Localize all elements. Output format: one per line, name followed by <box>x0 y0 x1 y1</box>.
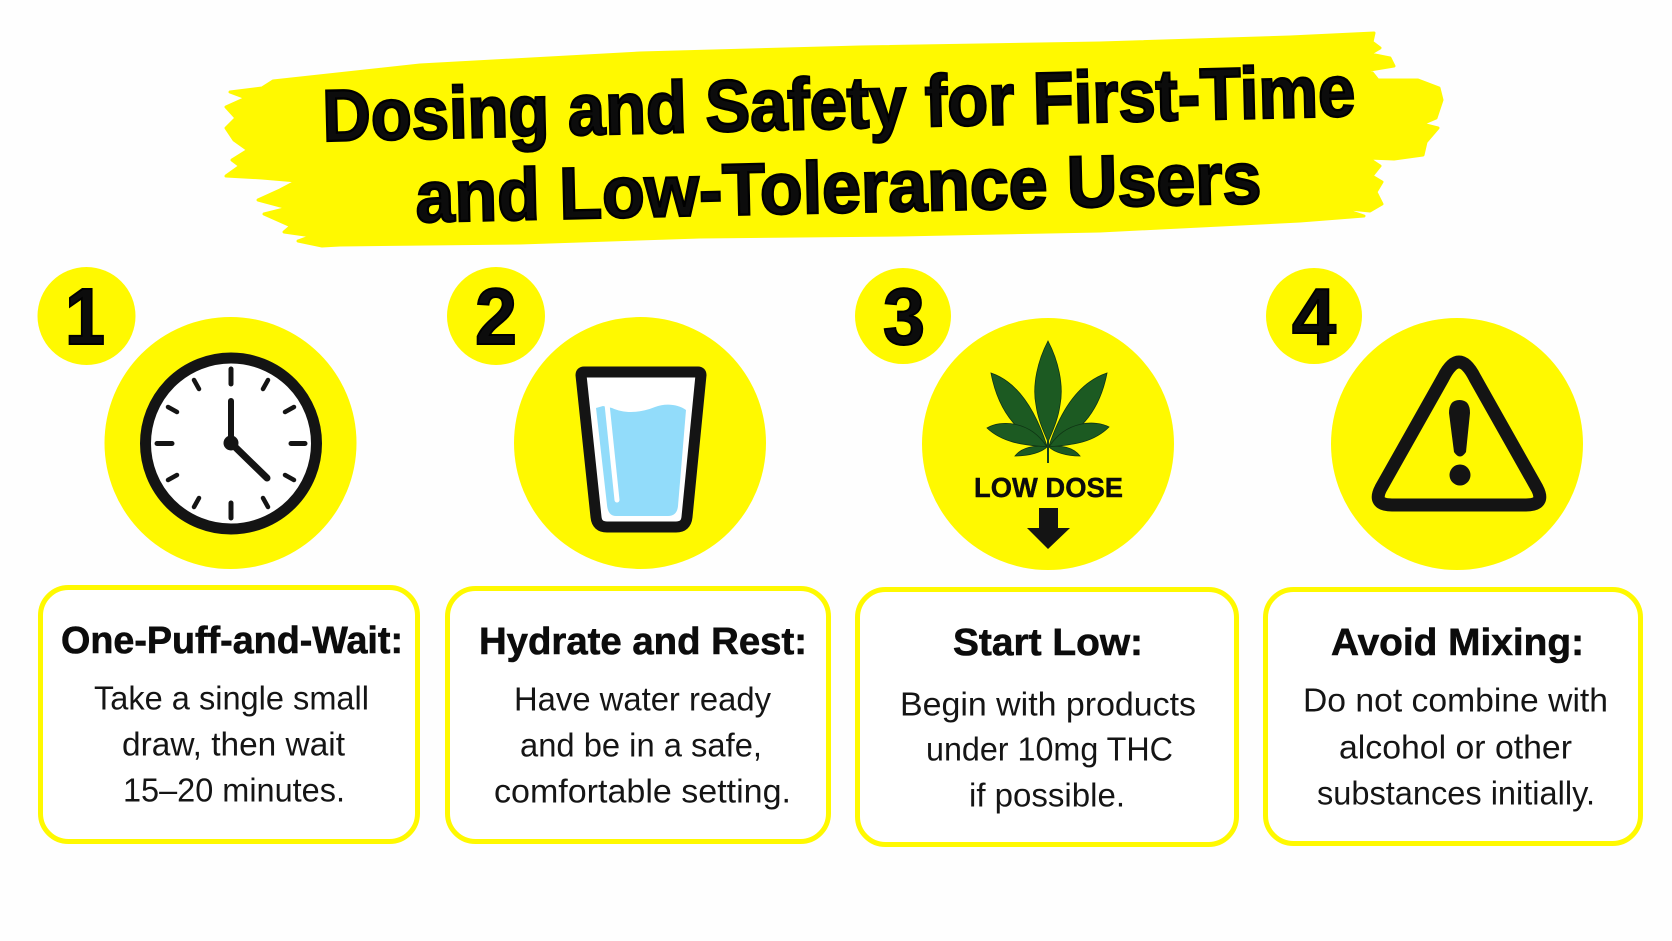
panel: hydrate and rest <box>447 267 828 842</box>
brush stroke background <box>226 33 1442 246</box>
panel: avoid mixing <box>1266 268 1640 844</box>
number badge 1: 1 <box>65 272 105 361</box>
number badge 3: 3 <box>883 272 925 361</box>
card <box>40 588 418 842</box>
icon: warning triangle <box>1331 318 1583 570</box>
card: Start Low: <box>953 622 1143 664</box>
icon: clock <box>104 317 356 569</box>
icon: low dose leaf: LOW DOSE <box>974 472 1123 503</box>
card: 15–20 minutes. <box>123 772 345 808</box>
number badge 2: 2 <box>475 272 517 361</box>
card: Do not combine with <box>1303 682 1608 718</box>
number badge 2 <box>447 267 545 365</box>
number badge 4: 4 <box>1292 272 1336 361</box>
card <box>858 590 1236 844</box>
card: Have water ready <box>514 680 771 718</box>
card: draw, then wait <box>122 726 345 762</box>
card: Avoid Mixing: <box>1331 622 1584 664</box>
card: Take a single small <box>94 680 369 716</box>
card: under 10mg THC <box>926 730 1173 768</box>
title text: and Low-Tolerance Users <box>415 138 1262 238</box>
card: if possible. <box>969 776 1125 814</box>
card <box>448 588 828 842</box>
panel: one-puff-and-wait <box>38 267 418 842</box>
number badge 4 <box>1266 268 1362 364</box>
card: substances initially. <box>1317 774 1595 812</box>
number badge 1 <box>38 267 136 365</box>
number badge 3 <box>855 268 951 364</box>
card: Begin with products <box>900 686 1196 722</box>
title banner <box>226 33 1442 246</box>
card: Hydrate and Rest: <box>479 621 807 663</box>
panel: start low <box>855 268 1236 844</box>
card: comfortable setting. <box>494 772 791 810</box>
card: alcohol or other <box>1339 728 1572 766</box>
title text: Dosing and Safety for First-Time <box>321 51 1356 157</box>
card: One-Puff-and-Wait: <box>61 620 403 662</box>
card <box>1266 590 1640 844</box>
title text <box>321 51 1356 238</box>
card: and be in a safe, <box>520 726 762 764</box>
icon: glass of water <box>514 317 766 569</box>
icon: low dose leaf <box>922 318 1174 570</box>
